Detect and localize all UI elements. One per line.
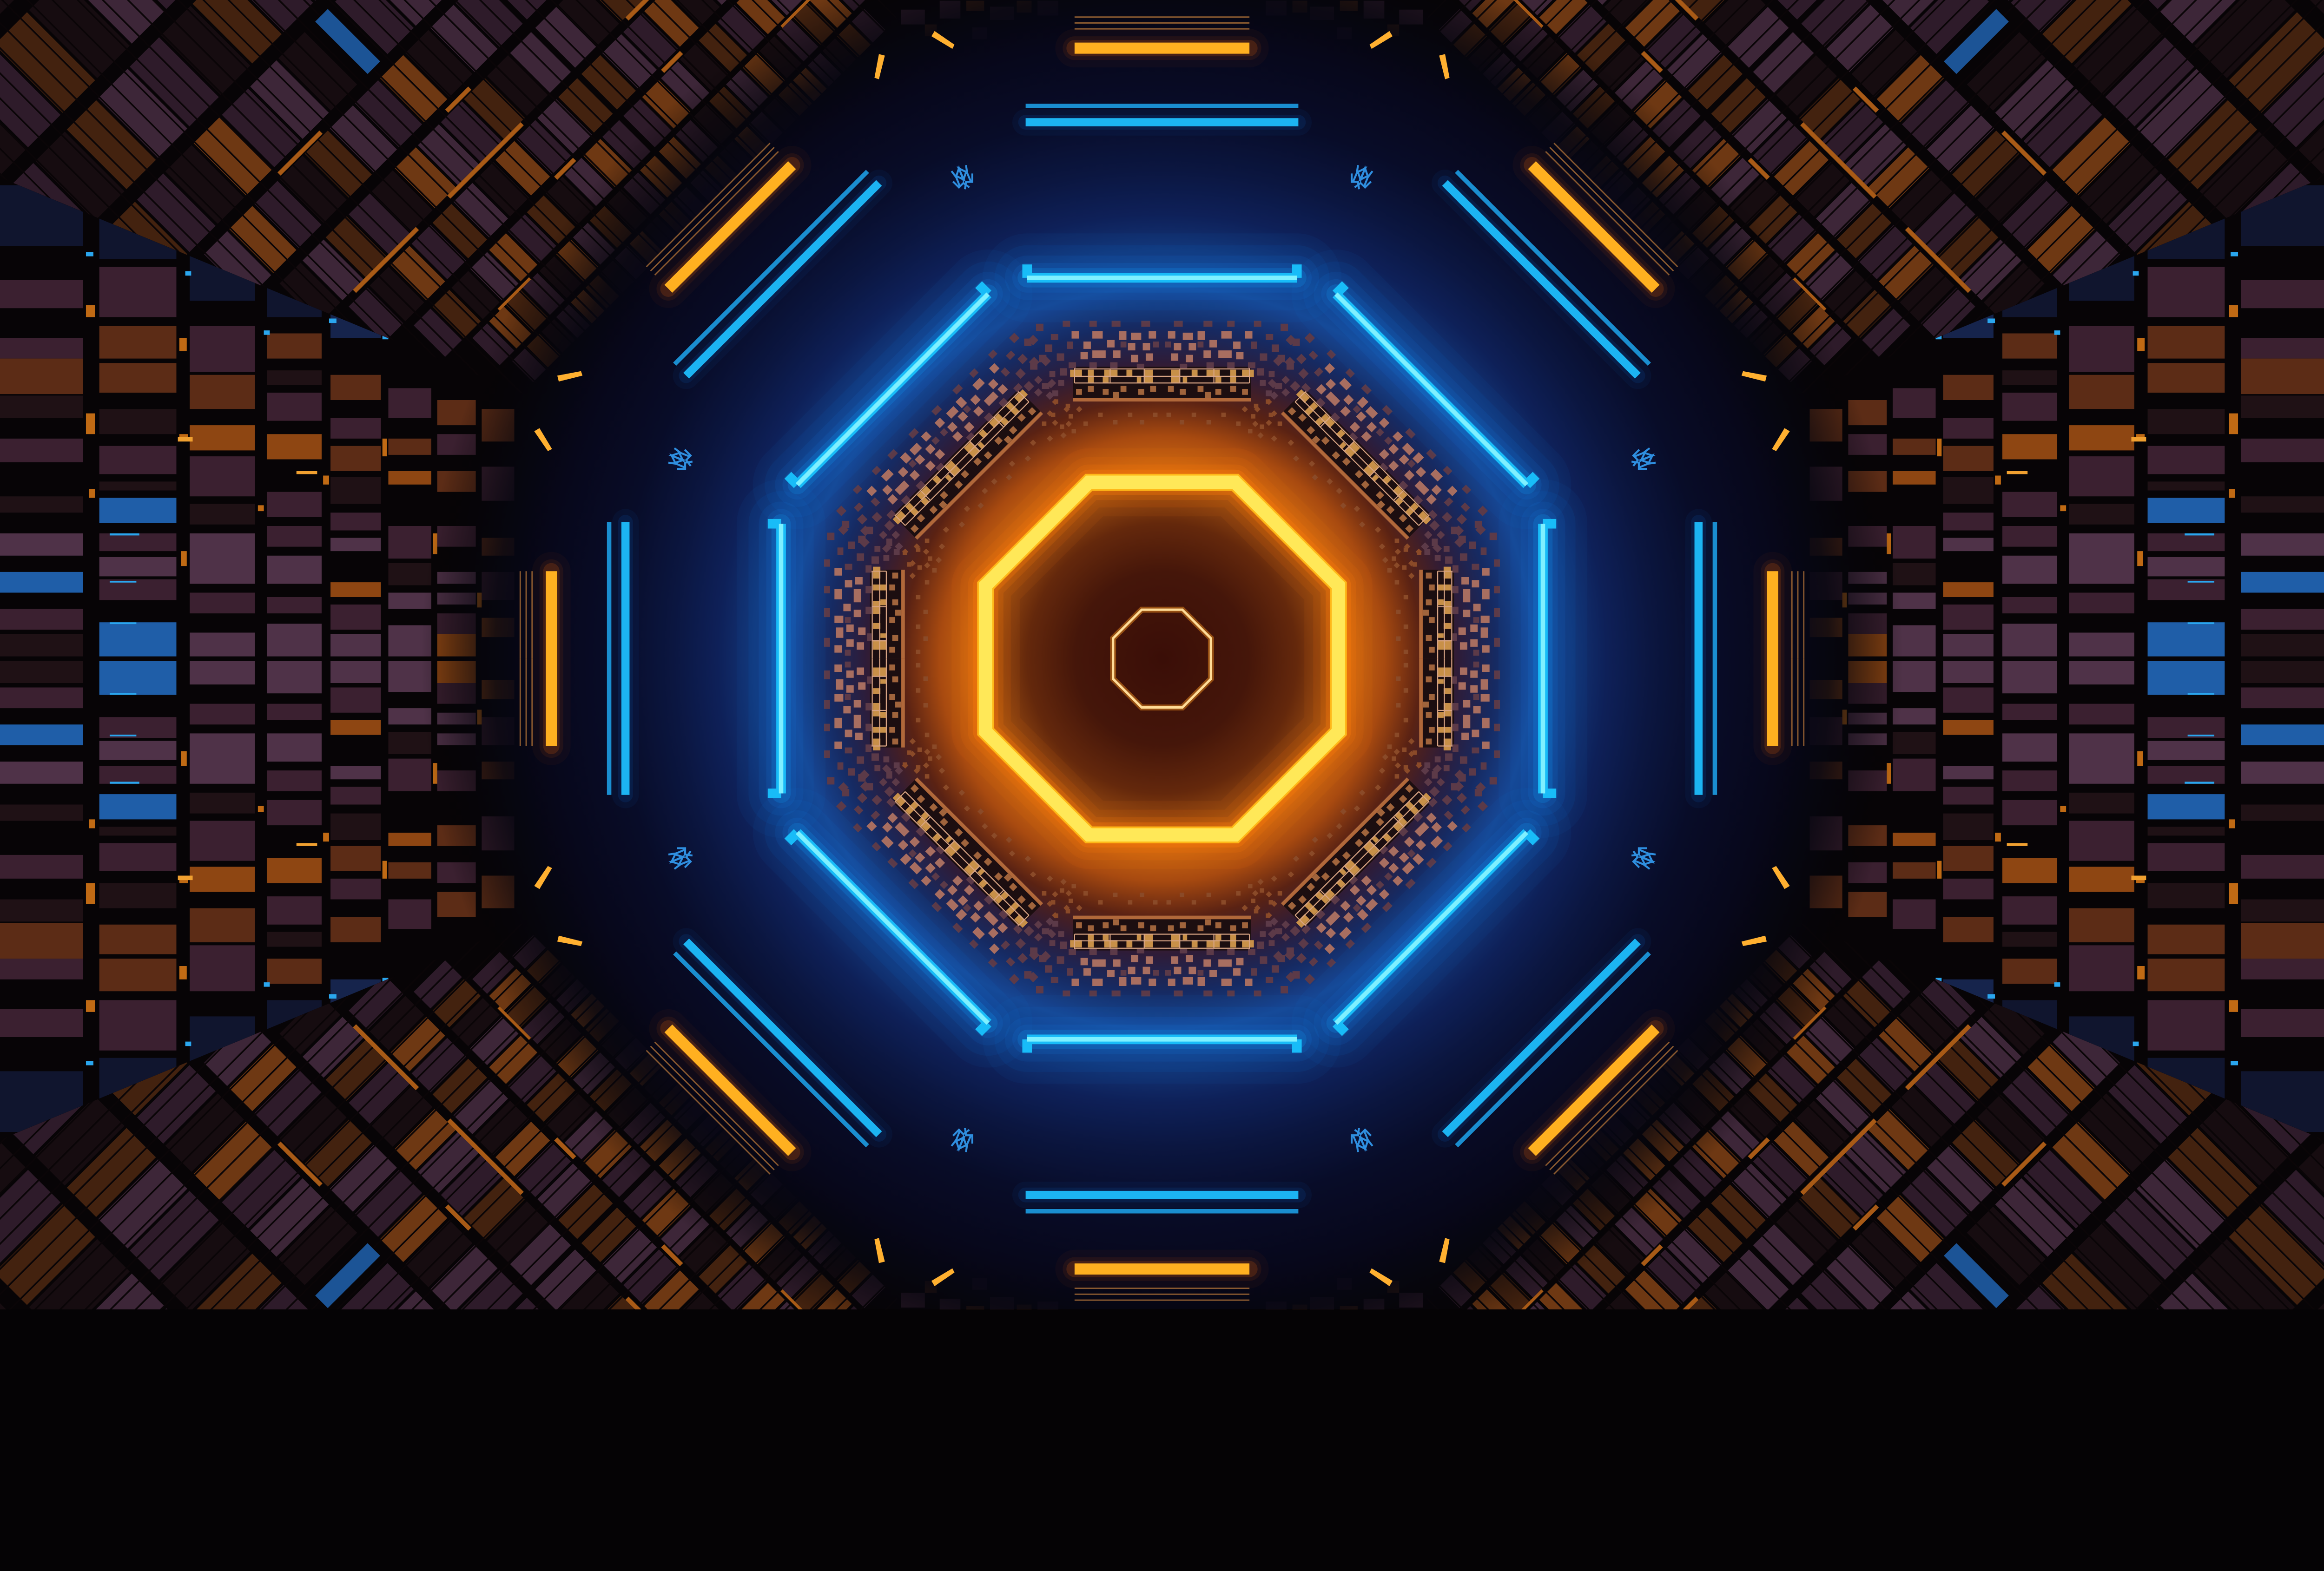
glow around orange bars [551, 48, 1773, 1269]
small neon octagon glow [1113, 610, 1211, 708]
blue neon bars, outer ring thick [626, 122, 1698, 1195]
blue glow around inner bars [781, 278, 1543, 1039]
blue neon bars, inner ring [768, 264, 1556, 1053]
glow around outer blue bars [626, 122, 1698, 1195]
panel: large neon octagon interior [986, 482, 1338, 835]
panel: circuit mosaic ring [505, 2, 1819, 1315]
orange neon bars [551, 48, 1773, 1269]
left and right wall panels [0, 179, 2324, 1138]
octagon neon hot core [986, 482, 1338, 835]
octagon fill [986, 482, 1338, 835]
small neon octagon [1113, 610, 1211, 708]
blue neon bars, inner ring hot core [781, 278, 1543, 1039]
octagon glow [986, 482, 1338, 835]
top and bottom wall fragments [901, 1, 1423, 1316]
octagon neon outer tube [986, 482, 1338, 835]
blue neon bars, outer ring thin [609, 106, 1715, 1211]
